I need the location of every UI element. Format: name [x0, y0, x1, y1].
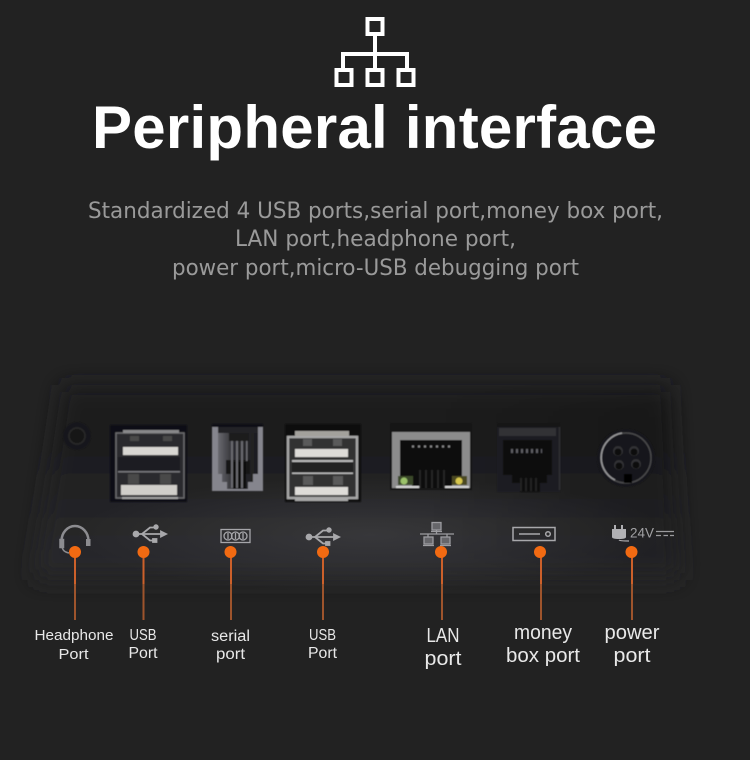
label: USB Port 2: USB	[309, 627, 336, 644]
label: Headphone Port: Headphone	[34, 627, 114, 644]
label: LAN port: port	[424, 648, 462, 670]
label: USB Port 1: USB	[130, 627, 156, 644]
icon: money box	[513, 528, 555, 540]
label: money box port: box port	[506, 645, 580, 667]
label: LAN port	[424, 625, 462, 670]
label: USB Port 1: Port	[128, 645, 158, 662]
icon: power plug with 24V: 24V	[630, 524, 655, 540]
serial port	[212, 424, 263, 491]
label: money box port: money	[514, 622, 572, 644]
label: money box port	[506, 622, 580, 667]
title: Peripheral interface	[92, 94, 657, 161]
label: Headphone Port: Port	[58, 646, 89, 663]
port labels	[34, 622, 660, 670]
icon: LAN computers	[420, 522, 454, 546]
description text: LAN port,headphone port,	[235, 226, 516, 252]
icon: power plug with 24V	[612, 524, 674, 541]
label: USB Port 2	[308, 627, 338, 662]
icon: headphone	[60, 526, 90, 553]
description text	[88, 198, 663, 281]
label: serial port: port	[216, 646, 246, 663]
icon: network hierarchy	[336, 19, 414, 85]
label: USB Port 1	[128, 627, 158, 662]
label: power port	[604, 622, 660, 667]
callout lines and dots	[69, 546, 638, 620]
icon: USB symbol 1	[134, 525, 166, 542]
headphone jack	[63, 422, 91, 450]
label: power port: port	[614, 645, 651, 667]
label: serial port: serial	[211, 628, 250, 645]
USB port 2	[285, 424, 361, 502]
USB port 1	[110, 425, 187, 502]
label: USB Port 2: Port	[308, 645, 338, 662]
description text: power port,micro-USB debugging port	[172, 255, 579, 281]
panel: device port strip	[33, 385, 680, 593]
power port	[597, 429, 655, 487]
description text: Standardized 4 USB ports,serial port,money box port,	[88, 198, 663, 224]
label: Headphone Port	[34, 627, 114, 663]
label: LAN port: LAN	[426, 625, 460, 647]
LAN port	[390, 423, 472, 490]
icon: serial symbol	[221, 530, 250, 542]
label: power port: power	[604, 622, 660, 644]
label: serial port	[211, 628, 250, 663]
icon: USB symbol 2	[306, 528, 339, 545]
money box port	[497, 423, 560, 492]
